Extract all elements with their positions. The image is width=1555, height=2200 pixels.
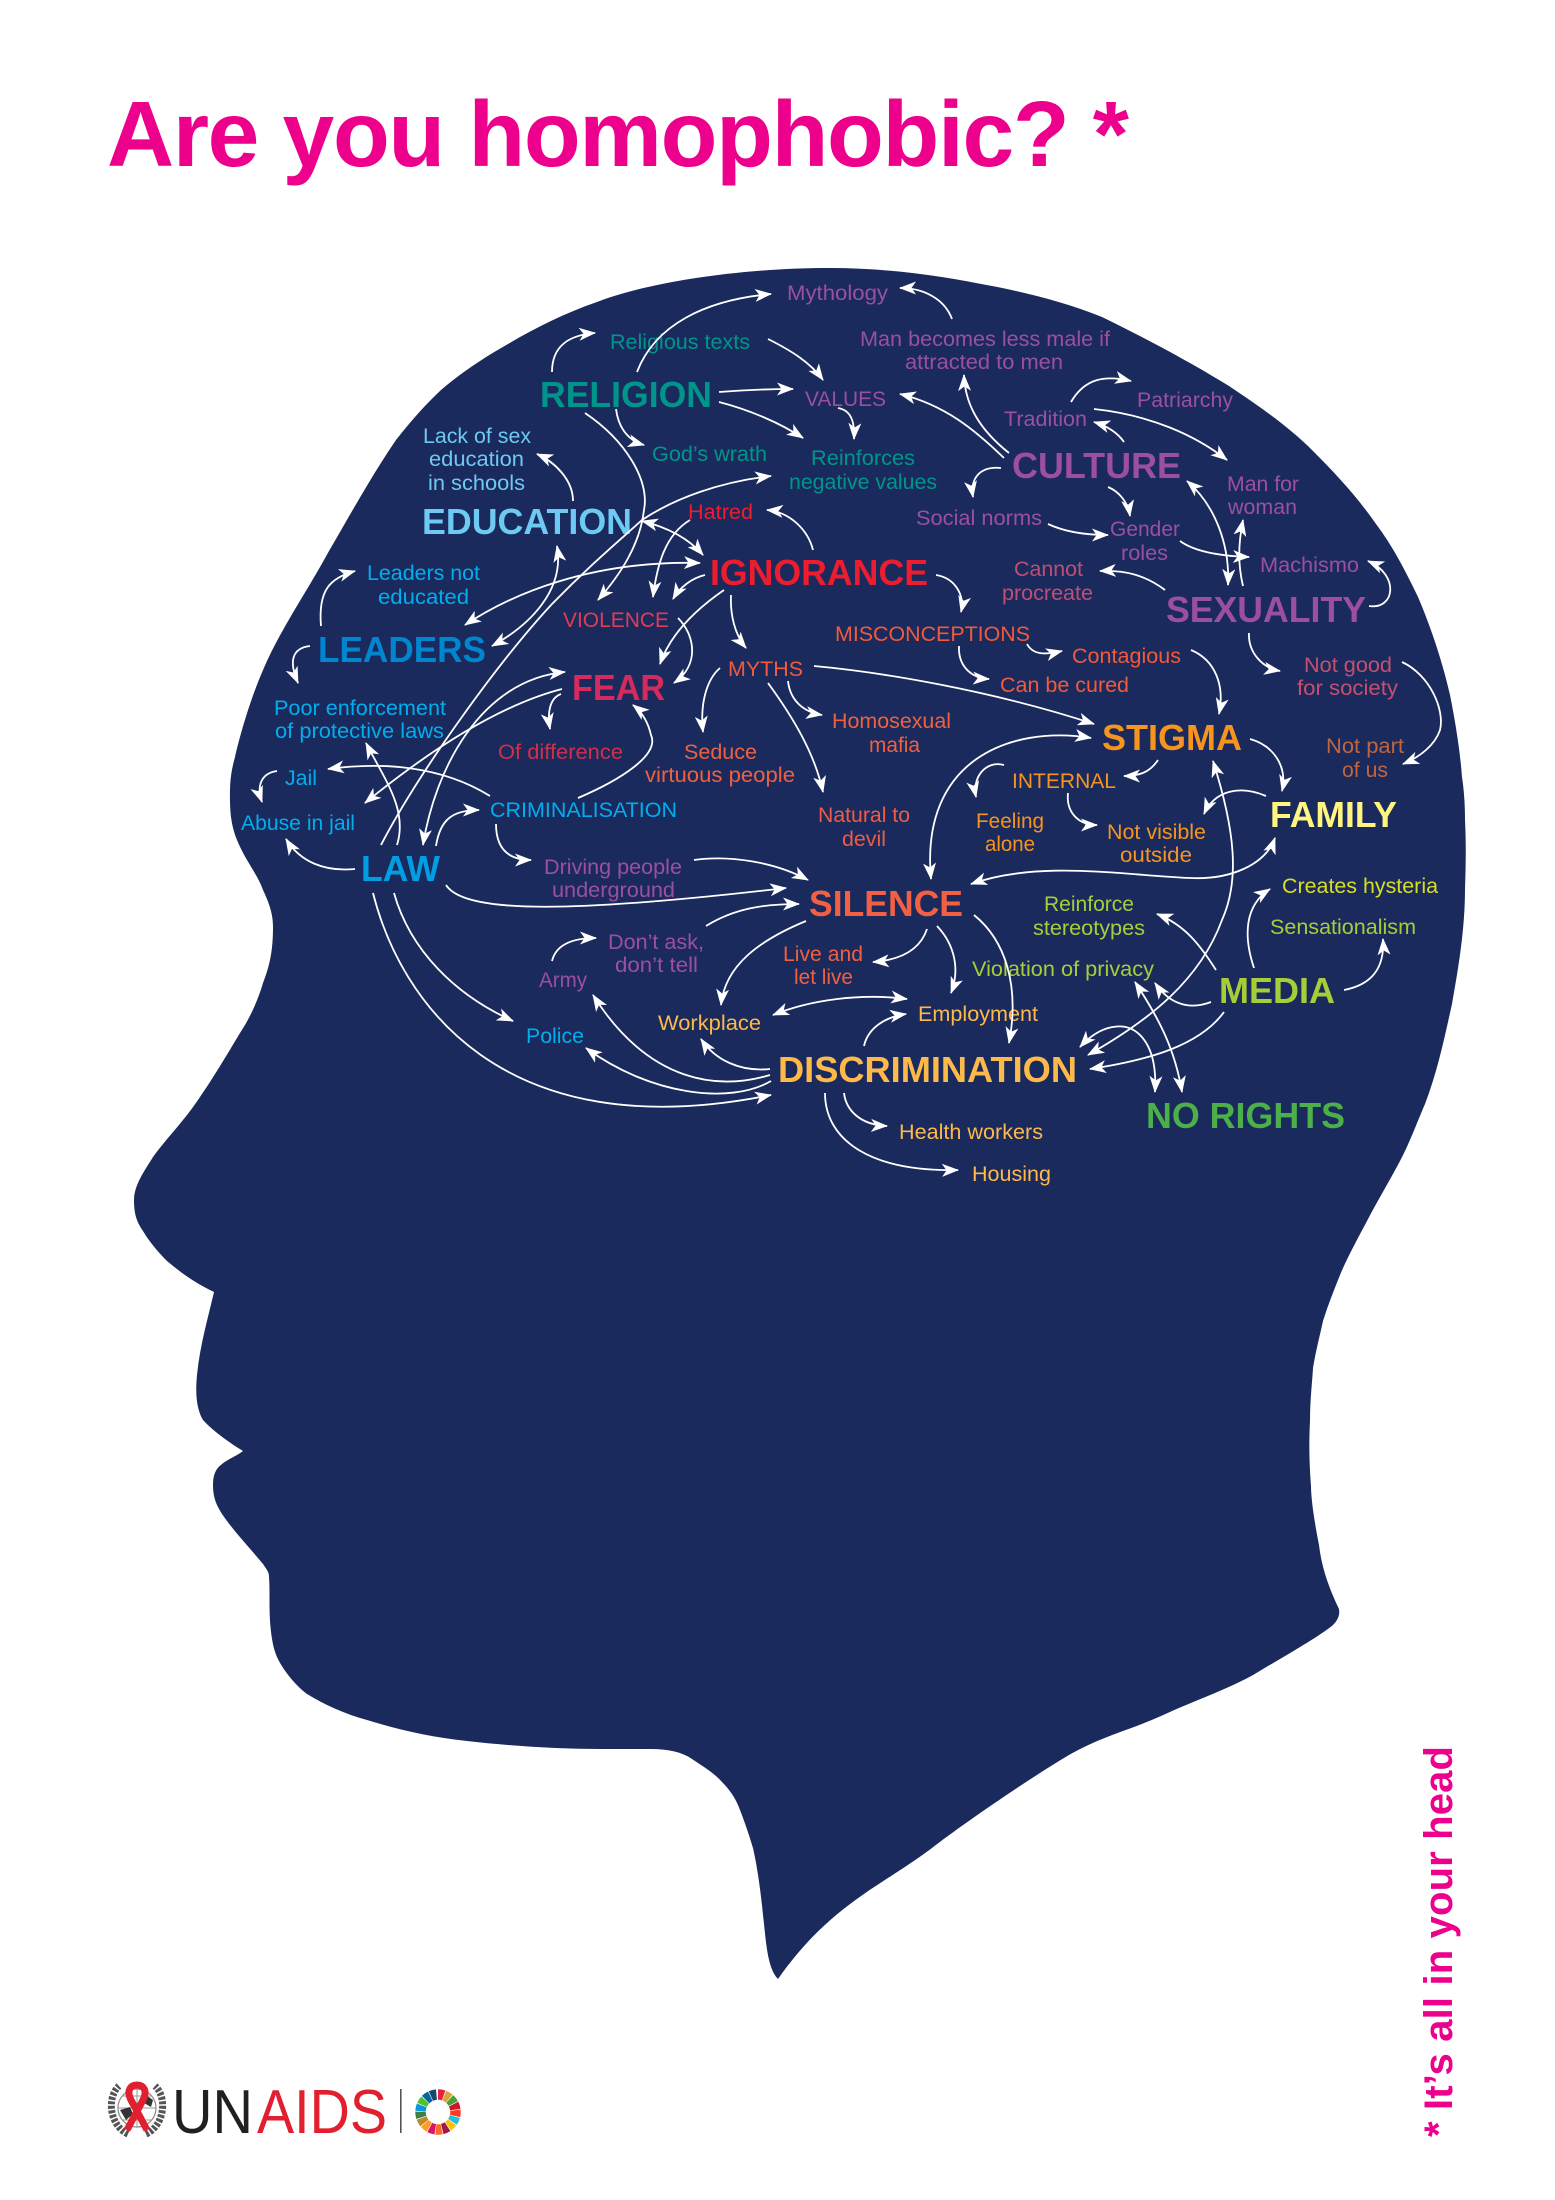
arrow: IGNORANCE to FEAR (660, 590, 724, 664)
label: Leaders not educated: educated (378, 585, 469, 609)
arrow: VALUES to Reinforces (838, 408, 854, 439)
arrow: STIGMA to FAMILY (1250, 739, 1283, 791)
arrow: MEDIA to Reinforce stereotypes (1157, 914, 1216, 970)
label: Man for woman: Man for (1227, 472, 1299, 496)
arrow: IGNORANCE to Hatred (767, 510, 813, 550)
label: Not visible outside (1107, 820, 1206, 867)
arrow: NO RIGHTS and Violation of privacy (1135, 982, 1182, 1092)
arrow: RELIGION to VALUES (719, 389, 793, 392)
icon: UN emblem with red ribbon (111, 2085, 163, 2134)
wordmark: UN: UN (172, 2078, 253, 2147)
label: Not visible outside: outside (1120, 843, 1192, 867)
arrow: Man becomes less male to Mythology (900, 288, 952, 319)
head silhouette (134, 268, 1466, 1979)
heading: NO RIGHTS: NO RIGHTS (1146, 1095, 1345, 1136)
label: Live and let live (783, 942, 863, 989)
arrow: MEDIA to Sensationalism (1344, 939, 1383, 990)
heading: LEADERS: LEADERS (318, 629, 486, 670)
arrow: MYTHS to Homosexual mafia (788, 681, 822, 715)
label: Reinforces negative values (789, 446, 937, 494)
heading: SEXUALITY: SEXUALITY (1166, 589, 1366, 630)
arrow: MYTHS to Seduce (702, 668, 720, 732)
arrow: RELIGION to Reinforces (719, 402, 803, 438)
arrow: Not good for society to Not part of us (1402, 662, 1441, 764)
arrow: STIGMA and SILENCE (930, 735, 1091, 879)
label: Feeling alone: Feeling (976, 809, 1044, 833)
arrow: IGNORANCE to MYTHS (731, 595, 746, 648)
arrow: Social norms to Gender roles (1048, 524, 1108, 535)
arrow: EDUCATION and LEADERS (492, 546, 558, 646)
heading: MEDIA: MEDIA (1219, 970, 1335, 1011)
arrow: RELIGION to VIOLENCE (585, 413, 645, 600)
arrow: DISCRIMINATION to Workplace (701, 1039, 770, 1069)
label: Don't ask, don't tell: Don’t ask, (608, 930, 704, 954)
label: Social norms: Social norms (916, 506, 1042, 530)
label: Tradition: Tradition (1004, 407, 1087, 431)
label: Poor enforcement of protective laws (274, 696, 446, 743)
label: Seduce virtuous people (645, 740, 795, 787)
arrow: FEAR to Abuse in jail (365, 689, 562, 803)
label: Man for woman: woman (1227, 495, 1297, 519)
arrow: Jail to Abuse in jail (260, 771, 277, 802)
arrow: MEDIA to Creates hysteria (1248, 889, 1270, 968)
side note: It's all in your head: * It’s all in your head (1417, 1746, 1461, 2137)
arrow: Don't ask to SILENCE (706, 904, 799, 926)
label: Gender roles: Gender (1110, 517, 1180, 541)
wordmark: AIDS: AIDS (257, 2078, 387, 2147)
arrow: LAW to DISCRIMINATION (373, 893, 771, 1107)
arrow: IGNORANCE to MISCONCEPTIONS (936, 575, 962, 612)
logo divider (400, 2089, 402, 2133)
label: Jail: Jail (285, 766, 317, 790)
heading: SILENCE: SILENCE (809, 883, 963, 924)
label: Not good for society: for society (1297, 676, 1398, 700)
label: VIOLENCE: VIOLENCE (563, 608, 669, 632)
label: Leaders not educated: Leaders not (367, 561, 480, 585)
label: INTERNAL: INTERNAL (1012, 769, 1116, 793)
arrow: DISCRIMINATION to Health workers (844, 1093, 887, 1126)
label: Reinforce stereotypes: stereotypes (1033, 916, 1145, 940)
label: Gender roles (1110, 517, 1180, 565)
arrow: IGNORANCE and LEADERS (465, 563, 700, 625)
label: Not good for society: Not good (1304, 653, 1392, 677)
arrow: Gender roles to Machismo (1180, 541, 1249, 557)
arrow: LEADERS to Poor enforcement (293, 646, 310, 683)
label: Lack of sex education in schools: education (429, 447, 524, 471)
arrow: LAW and FEAR (423, 672, 565, 845)
label: Man becomes less male if attracted to men: Man becomes less male if (860, 327, 1110, 351)
heading: STIGMA: STIGMA (1102, 717, 1242, 758)
heading: DISCRIMINATION: DISCRIMINATION (778, 1049, 1077, 1090)
arrow: FAMILY to Not visible outside (1204, 790, 1266, 814)
arrow: SEXUALITY to Cannot procreate (1100, 571, 1165, 590)
arrow: Tradition to Man for woman (1094, 409, 1227, 460)
arrow: LAW to Abuse in jail (286, 839, 355, 870)
arrow: SILENCE to Employment (937, 926, 955, 993)
arrow: DISCRIMINATION to Army (593, 995, 770, 1082)
label: Employment: Employment (918, 1002, 1038, 1026)
panel: connecting arrows (260, 288, 1441, 1170)
label: Don't ask, don't tell (608, 930, 704, 977)
label: Army: Army (539, 968, 587, 992)
arrow: CULTURE and SEXUALITY (1187, 481, 1228, 585)
label: MYTHS: MYTHS (728, 657, 803, 681)
arrow: MYTHS to Natural to devil (768, 683, 823, 792)
arrow: MEDIA to DISCRIMINATION (1090, 1012, 1224, 1069)
label: Feeling alone: alone (985, 832, 1035, 856)
label: Driving people underground: Driving people (544, 855, 682, 879)
label: Natural to devil: Natural to (818, 803, 910, 827)
arrow: EDUCATION to Lack of sex education (537, 454, 573, 501)
label: Leaders not educated (367, 561, 480, 609)
label: Can be cured: Can be cured (1000, 673, 1129, 697)
label: Of difference: Of difference (498, 740, 623, 764)
arrow: CULTURE to Man becomes less male (964, 375, 1009, 453)
arrow: SEXUALITY to Man for woman (1239, 520, 1243, 586)
heading: CULTURE: CULTURE (1012, 445, 1181, 486)
arrow: DISCRIMINATION to Police (586, 1048, 771, 1094)
label: Poor enforcement of protective laws: of protective laws (275, 719, 444, 743)
arrow: Army to Don't ask (552, 938, 596, 961)
label: Patriarchy: Patriarchy (1137, 388, 1233, 412)
arrow: STIGMA to INTERNAL (1124, 760, 1158, 776)
heading: LAW: LAW (361, 848, 440, 889)
arrow: SILENCE and FAMILY (971, 838, 1275, 884)
arrow: INTERNAL to Feeling alone (975, 764, 1004, 797)
arrow: CULTURE to VALUES (900, 394, 1004, 458)
arrow: STIGMA and DISCRIMINATION (1088, 761, 1233, 1055)
arrow: CULTURE to Tradition (1094, 422, 1124, 442)
label: Cannot procreate: Cannot (1014, 557, 1083, 581)
arrow: CRIMINALISATION to FEAR (578, 705, 652, 798)
arrow: RELIGION to Mythology (637, 294, 771, 372)
label: Seduce virtuous people: Seduce (684, 740, 757, 764)
arrow: Tradition to Patriarchy (1071, 378, 1131, 402)
label: Driving people underground: underground (552, 878, 675, 902)
label: Man becomes less male if attracted to men: attracted to men (905, 350, 1063, 374)
arrow: SILENCE to Live and let live (873, 929, 927, 962)
arrow: LAW to Police (394, 893, 513, 1021)
label: CRIMINALISATION: CRIMINALISATION (490, 798, 677, 822)
label: Mythology: Mythology (787, 281, 888, 305)
label: God's wrath: God’s wrath (652, 442, 767, 466)
arrow: CRIMINALISATION to Driving people underground (496, 824, 531, 860)
arrow: NO RIGHTS and DISCRIMINATION (1080, 1026, 1155, 1092)
label: Live and let live: let live (794, 965, 853, 989)
label: Not part of us: Not part (1326, 734, 1404, 758)
heading: FEAR: FEAR (572, 667, 665, 708)
arrow: CULTURE to Social norms (972, 468, 1001, 497)
label: Man becomes less male if attracted to men (860, 327, 1110, 374)
label: Natural to devil: devil (842, 827, 886, 851)
label: Gender roles: roles (1121, 541, 1168, 565)
heading: EDUCATION: EDUCATION (422, 501, 632, 542)
label: Homosexual mafia: mafia (869, 733, 920, 757)
label: Religious texts: Religious texts (610, 330, 750, 354)
arrow: Driving people underground to SILENCE (694, 858, 808, 880)
label: Seduce virtuous people: virtuous people (645, 763, 795, 787)
arrow: MEDIA to Violation of privacy (1155, 983, 1211, 1006)
arrow: MISCONCEPTIONS to Contagious (1027, 644, 1062, 653)
label: Not part of us (1326, 734, 1404, 782)
label: Machismo: Machismo (1260, 553, 1359, 577)
label: Not part of us: of us (1342, 758, 1388, 782)
title: Are you homophobic? * (107, 82, 1130, 186)
arrow: DISCRIMINATION to Employment (864, 1014, 906, 1046)
label: Live and let live: Live and (783, 942, 863, 966)
arrow: IGNORANCE to VIOLENCE (673, 575, 705, 599)
label: Cannot procreate: procreate (1002, 581, 1093, 605)
label: Not good for society (1297, 653, 1398, 700)
label: Homosexual mafia: Homosexual (832, 709, 951, 733)
label: Natural to devil (818, 803, 910, 851)
logo: UNAIDS (111, 2078, 463, 2147)
label: Police: Police (526, 1024, 584, 1048)
arrow: LAW to SILENCE (446, 885, 786, 907)
label: Violation of privacy: Violation of privacy (972, 957, 1154, 981)
arrow: CRIMINALISATION to Jail (328, 766, 490, 796)
label: Cannot procreate (1002, 557, 1093, 605)
heading: RELIGION: RELIGION (540, 374, 712, 415)
label: MISCONCEPTIONS: MISCONCEPTIONS (835, 622, 1030, 646)
arrow: DISCRIMINATION to Housing (825, 1093, 958, 1170)
arrow: Workplace and Employment (773, 997, 907, 1015)
arrow: Religious texts to VALUES (768, 339, 823, 380)
label: Not visible outside: Not visible (1107, 820, 1206, 844)
label: VALUES: VALUES (805, 387, 886, 411)
arrow: IGNORANCE and EDUCATION (642, 521, 703, 555)
label: Contagious: Contagious (1072, 644, 1181, 668)
arrow: SILENCE to DISCRIMINATION (974, 915, 1013, 1043)
arrow: FEAR to Of difference (549, 694, 561, 729)
label: Man for woman (1227, 472, 1299, 519)
label: Sensationalism: Sensationalism (1270, 915, 1416, 939)
label: Abuse in jail: Abuse in jail (241, 811, 355, 835)
label: Reinforce stereotypes: Reinforce (1044, 892, 1134, 916)
arrow: VIOLENCE to FEAR (674, 618, 692, 683)
arrow: LEADERS to Leaders not educated (321, 571, 355, 626)
label: Hatred: Hatred (688, 500, 753, 524)
label: Lack of sex education in schools: in schools (428, 471, 525, 495)
arrow: Hatred to VIOLENCE (653, 520, 690, 597)
panel: concept map labels (241, 281, 1438, 1186)
arrow: MYTHS to STIGMA (814, 666, 1094, 724)
arrow: Contagious to STIGMA (1191, 650, 1221, 714)
arrow: LAW to Reinforces negative values (381, 476, 771, 845)
arrow: INTERNAL to Not visible outside (1068, 793, 1097, 825)
arrow: RELIGION to God's wrath (616, 409, 644, 445)
label: Health workers: Health workers (899, 1120, 1043, 1144)
label: Feeling alone (976, 809, 1044, 856)
label: Poor enforcement of protective laws: Poor enforcement (274, 696, 446, 720)
arrow: MISCONCEPTIONS to Can be cured (959, 646, 989, 679)
label: Lack of sex education in schools (423, 424, 531, 495)
label: Homosexual mafia (832, 709, 951, 757)
arrow: LAW to Poor enforcement (366, 743, 400, 845)
arrow: CULTURE to Gender roles (1108, 487, 1130, 516)
label: Don't ask, don't tell: don’t tell (615, 953, 698, 977)
label: Reinforces negative values: negative values (789, 470, 937, 494)
icon: SDG wheel (413, 2087, 463, 2137)
label: Workplace: Workplace (658, 1011, 761, 1035)
label: Lack of sex education in schools: Lack of sex (423, 424, 531, 448)
arrow: SILENCE to Workplace (721, 921, 806, 1005)
label: Creates hysteria: Creates hysteria (1282, 874, 1438, 898)
arrow: RELIGION to Religious texts (552, 333, 595, 372)
arrow: SEXUALITY to Machismo (1368, 561, 1390, 606)
label: Reinforce stereotypes (1033, 892, 1145, 940)
label: Housing: Housing (972, 1162, 1051, 1186)
label: Reinforces negative values: Reinforces (811, 446, 915, 470)
heading: IGNORANCE: IGNORANCE (710, 552, 928, 593)
arrow: SEXUALITY to Not good for society (1249, 633, 1280, 671)
arrow: LAW to CRIMINALISATION (436, 810, 479, 846)
label: Driving people underground (544, 855, 682, 902)
heading: FAMILY: FAMILY (1270, 794, 1397, 835)
